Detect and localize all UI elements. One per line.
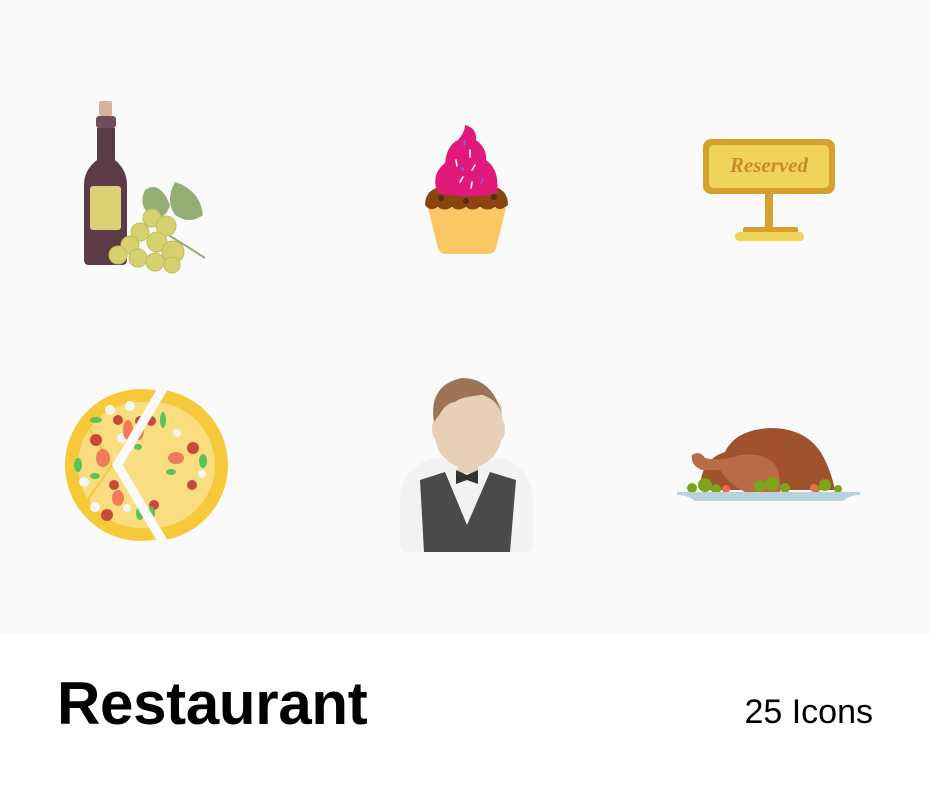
icon: reserved sign: Reserved: [729, 153, 809, 177]
icon: roast turkey: [677, 428, 860, 501]
title: Restaurant: [57, 670, 367, 737]
icon: waiter: [400, 378, 533, 552]
icon: reserved sign: [703, 139, 835, 241]
icon: pizza: [65, 389, 228, 541]
icon: cupcake: [425, 125, 508, 254]
icon: wine bottle and grapes: [84, 101, 205, 273]
icon count: 25 Icons: [744, 693, 873, 731]
